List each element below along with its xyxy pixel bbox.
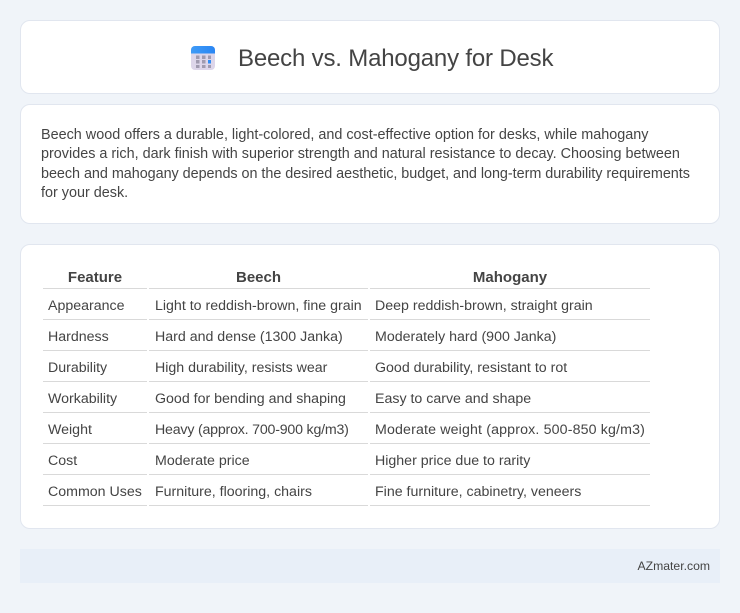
comparison table: Heavy (approx. 700-900 kg/m3): [155, 422, 349, 438]
comparison table: Moderate weight (approx. 500-850 kg/m3): [375, 422, 645, 438]
header panel: [20, 20, 720, 94]
comparison table: Appearance: [48, 298, 125, 314]
comparison table: Moderately hard (900 Janka): [375, 329, 556, 345]
description text: [41, 127, 690, 201]
comparison table: Hard and dense (1300 Janka): [155, 329, 343, 345]
comparison table: Weight: [48, 422, 92, 438]
comparison table: High durability, resists wear: [155, 360, 327, 376]
description text: beech and mahogany depends on the desired aesthetic, budget, and long-term durability requirements: [41, 166, 690, 182]
comparison table: Beech: [236, 269, 281, 286]
description text: for your desk.: [41, 185, 128, 201]
description text: Beech wood offers a durable, light-colored, and cost-effective option for desks, while mahogany: [41, 127, 648, 143]
comparison table: Fine furniture, cabinetry, veneers: [375, 484, 581, 500]
comparison table: Durability: [48, 360, 107, 376]
comparison table: Hardness: [48, 329, 109, 345]
comparison table: Moderate price: [155, 453, 250, 469]
footer bar: [20, 549, 720, 583]
comparison table: Deep reddish-brown, straight grain: [375, 298, 593, 314]
comparison table: Good durability, resistant to rot: [375, 360, 567, 376]
comparison table: Good for bending and shaping: [155, 391, 346, 407]
panel: comparison table: [20, 244, 720, 529]
comparison table: Mahogany: [473, 269, 547, 286]
comparison table: Easy to carve and shape: [375, 391, 531, 407]
comparison table: Furniture, flooring, chairs: [155, 484, 312, 500]
footer credit: AZmater.com: [638, 559, 710, 573]
comparison table: Light to reddish-brown, fine grain: [155, 298, 362, 314]
comparison table: Common Uses: [48, 484, 142, 500]
comparison table: Workability: [48, 391, 117, 407]
comparison table: [43, 269, 650, 506]
comparison table: Cost: [48, 453, 77, 469]
panel: description: [20, 104, 720, 224]
description text: provides a rich, dark finish with superior strength and natural resistance to decay. Choosing between: [41, 146, 680, 162]
comparison table: Feature: [68, 269, 122, 286]
title: Beech vs. Mahogany for Desk: [238, 45, 553, 72]
comparison table: Higher price due to rarity: [375, 453, 530, 469]
icon: calendar: [191, 46, 215, 70]
